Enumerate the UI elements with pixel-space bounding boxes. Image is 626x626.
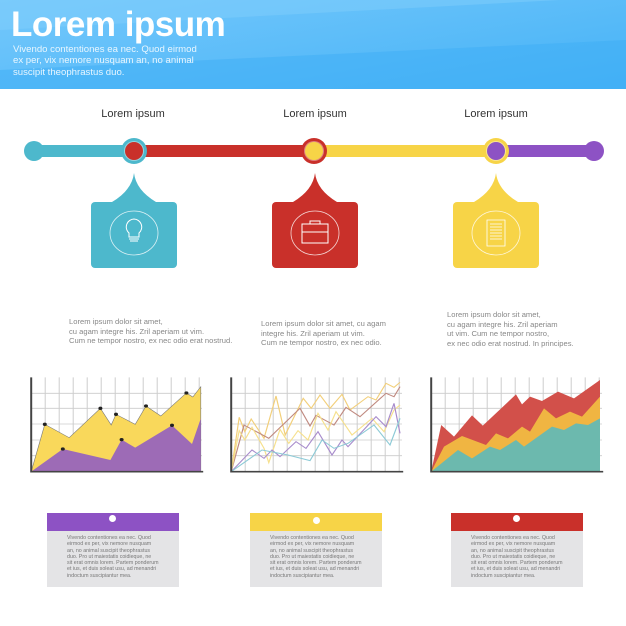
card 3: Vivendo contentiones ea nec. Quod xyxy=(471,535,555,541)
paragraph 3: Lorem ipsum dolor sit amet, xyxy=(447,310,541,319)
card 2: Vivendo contentiones ea nec. Quod xyxy=(270,535,354,541)
chart 3 xyxy=(431,377,603,472)
step labels xyxy=(101,108,528,120)
chart 2 xyxy=(231,377,403,472)
icon box: briefcase xyxy=(272,173,358,268)
card 2: eirmod ex per, vix nemore nusquam xyxy=(270,541,354,547)
card 3: an, no animal suscipit theophrastus xyxy=(471,548,554,554)
paragraph 3 xyxy=(447,310,574,348)
card 2 xyxy=(250,513,382,587)
paragraph 2: Lorem ipsum dolor sit amet, cu agam xyxy=(261,319,386,328)
paragraph 1 xyxy=(69,317,232,345)
step labels: Lorem ipsum xyxy=(283,108,347,120)
title: Lorem ipsum xyxy=(11,5,225,44)
chart 1 xyxy=(31,377,203,472)
paragraph 3: ut vim. Cum ne tempor nostro, xyxy=(447,329,549,338)
card 1: eirmod ex per, vix nemore nusquam xyxy=(67,541,151,547)
step labels: Lorem ipsum xyxy=(101,108,165,120)
card 1 xyxy=(47,513,179,587)
paragraph 1: Cum ne tempor nostro, ex nec odio erat nostrud. xyxy=(69,336,232,345)
card 3: sit erat omnis lorem. Partem ponderum xyxy=(471,560,563,566)
card 3: duo. Pro ut maiestatis coidieque, ne xyxy=(471,554,555,560)
card 1: indoctum suscipiantur mea. xyxy=(67,573,131,579)
header band xyxy=(0,0,626,89)
paragraph 1: cu agam integre his. Zril aperiam ut vim. xyxy=(69,327,204,336)
paragraph 2: Cum ne tempor nostro, ex nec odio. xyxy=(261,338,382,347)
card 3 xyxy=(451,513,583,587)
paragraph 1: Lorem ipsum dolor sit amet, xyxy=(69,317,163,326)
paragraph 3: ex nec odio erat nostrud. In principes. xyxy=(447,339,574,348)
card 2: duo. Pro ut maiestatis coidieque, ne xyxy=(270,554,354,560)
subtitle: ex per, vix nemore nusquam an, no animal xyxy=(13,55,194,66)
icon box: bulb xyxy=(91,173,177,268)
paragraph 2: integre his. Zril aperiam ut vim. xyxy=(261,329,365,338)
subtitle xyxy=(13,44,197,78)
card 2: et ius, et duis soleat usu, ad menandri xyxy=(270,566,359,572)
card 1: an, no animal suscipit theophrastus xyxy=(67,548,150,554)
card 3: eirmod ex per, vix nemore nusquam xyxy=(471,541,555,547)
card 2: an, no animal suscipit theophrastus xyxy=(270,548,353,554)
subtitle: suscipit theophrastus duo. xyxy=(13,67,124,78)
paragraph 2 xyxy=(261,319,386,347)
icon box: document xyxy=(453,173,539,268)
card 1: et ius, et duis soleat usu, ad menandri xyxy=(67,566,156,572)
card 2: indoctum suscipiantur mea. xyxy=(270,573,334,579)
card 1: duo. Pro ut maiestatis coidieque, ne xyxy=(67,554,151,560)
paragraph 3: cu agam integre his. Zril aperiam xyxy=(447,320,558,329)
subtitle: Vivendo contentiones ea nec. Quod eirmod xyxy=(13,44,197,55)
step labels: Lorem ipsum xyxy=(464,108,528,120)
card 3: et ius, et duis soleat usu, ad menandri xyxy=(471,566,560,572)
card 1: sit erat omnis lorem. Partem ponderum xyxy=(67,560,159,566)
card 2: sit erat omnis lorem. Partem ponderum xyxy=(270,560,362,566)
card 3: indoctum suscipiantur mea. xyxy=(471,573,535,579)
header decorative light xyxy=(0,0,626,89)
card 1: Vivendo contentiones ea nec. Quod xyxy=(67,535,151,541)
